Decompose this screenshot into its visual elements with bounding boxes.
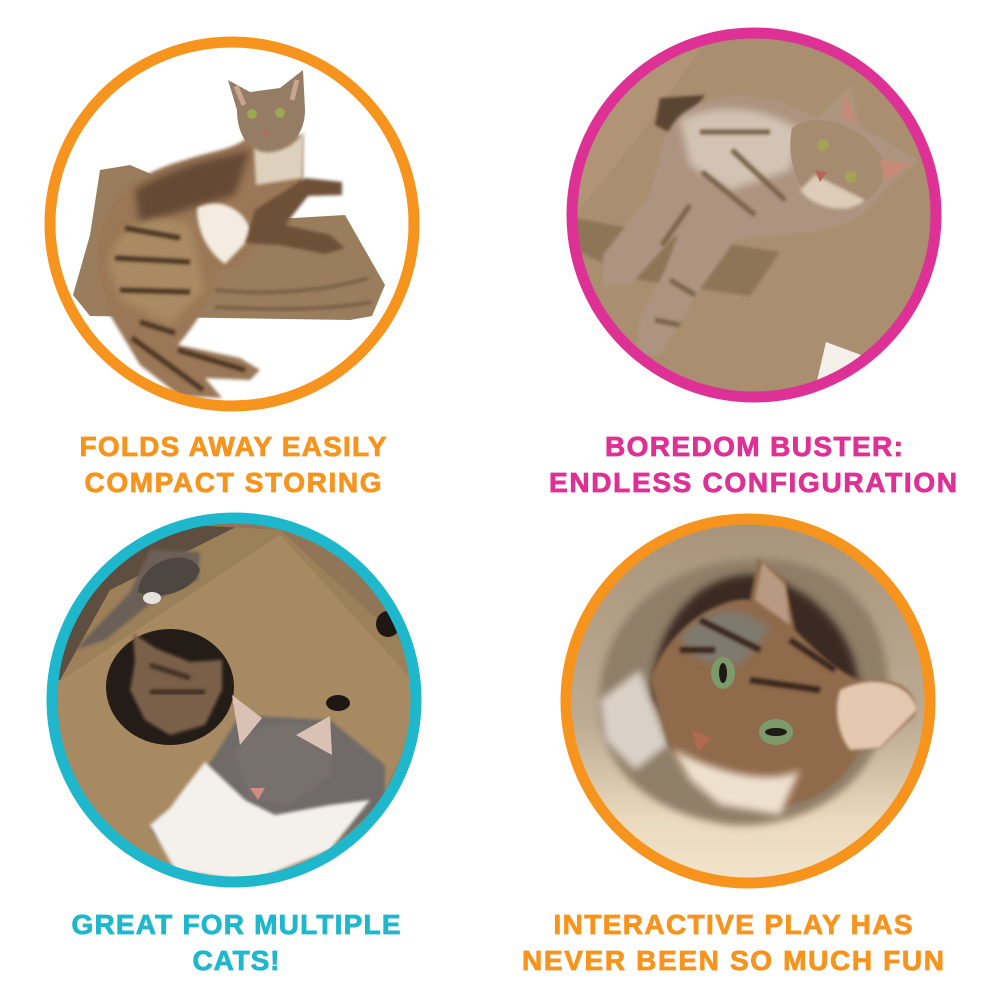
subheading: CATS!	[192, 945, 280, 976]
ring: pink	[572, 33, 936, 397]
photo: cat reclining on scratching mat	[578, 38, 930, 392]
heading: INTERACTIVE PLAY HAS	[554, 909, 912, 940]
photo: kittens in mat tunnel	[58, 524, 410, 876]
heading: BOREDOM BUSTER:	[605, 431, 903, 462]
subheading: NEVER BEEN SO MUCH FUN	[522, 945, 944, 976]
panel: multiple cats	[40, 500, 430, 976]
panel: boredom buster	[549, 20, 957, 498]
heading: GREAT FOR MULTIPLE	[72, 909, 400, 940]
subheading: ENDLESS CONFIGURATION	[549, 467, 957, 498]
heading: FOLDS AWAY EASILY	[80, 431, 387, 462]
panel: folds away easily	[40, 30, 430, 498]
photo: tabby cat lying on folded mat	[73, 70, 385, 400]
photo: cat peeking through tunnel	[572, 524, 924, 878]
ring: orange	[50, 42, 414, 406]
panel: interactive play	[522, 515, 944, 976]
subheading: COMPACT STORING	[84, 467, 382, 498]
ring: orange	[566, 519, 930, 883]
ring: teal	[52, 518, 416, 882]
